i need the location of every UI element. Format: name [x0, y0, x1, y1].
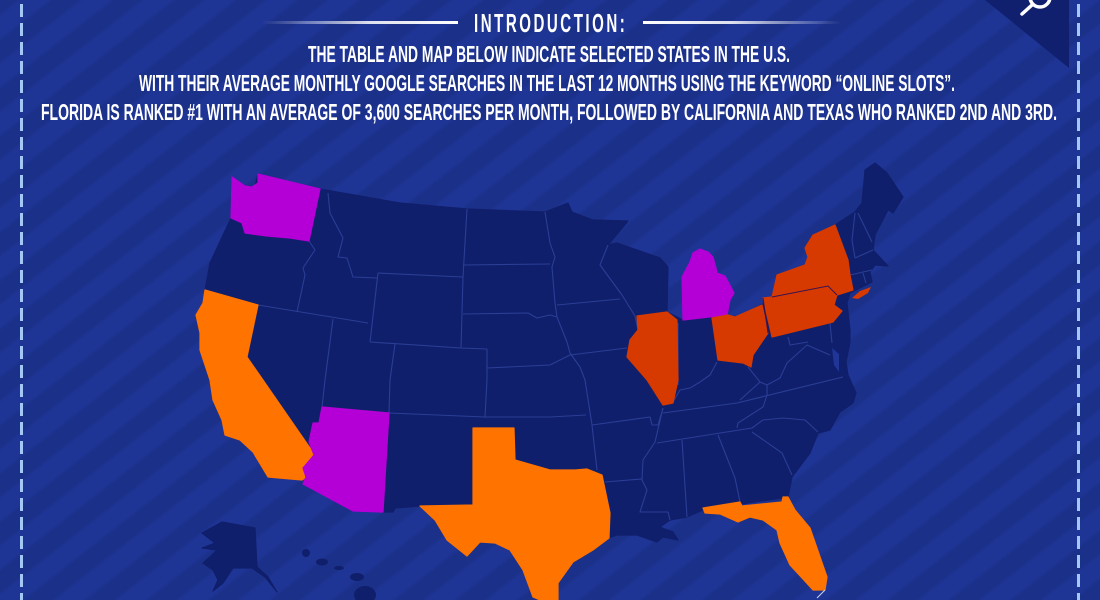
- state: California: [196, 290, 314, 480]
- state: Illinois: [627, 312, 678, 405]
- Chesapeake Bay: [832, 348, 839, 372]
- state: Texas: [420, 428, 610, 600]
- intro text block: [41, 41, 1057, 125]
- Alaska: [202, 522, 277, 592]
- state: Pennsylvania: [763, 286, 842, 337]
- state: Ohio: [712, 305, 768, 367]
- Hawaii: [302, 549, 376, 600]
- state: Michigan: [682, 249, 734, 320]
- state: Washington: [231, 174, 320, 241]
- right dashed border: [1077, 4, 1080, 600]
- state: Florida: [703, 497, 827, 590]
- heading: introduction: [262, 9, 841, 38]
- state: New York: [772, 225, 853, 297]
- Florida Keys: [817, 590, 825, 598]
- US map: [196, 163, 903, 600]
- heading: introduction: INTRODUCTION:: [474, 9, 625, 38]
- left dashed border: [20, 4, 23, 600]
- Pennsylvania border lines: [763, 286, 837, 333]
- Long Island: [852, 287, 871, 299]
- icon: magnifier: [1022, 0, 1050, 14]
- state: Arizona: [303, 407, 389, 512]
- state borders: [258, 193, 873, 520]
- contiguous states base shape: [205, 163, 903, 542]
- corner ribbon with magnifier icon: [985, 0, 1069, 68]
